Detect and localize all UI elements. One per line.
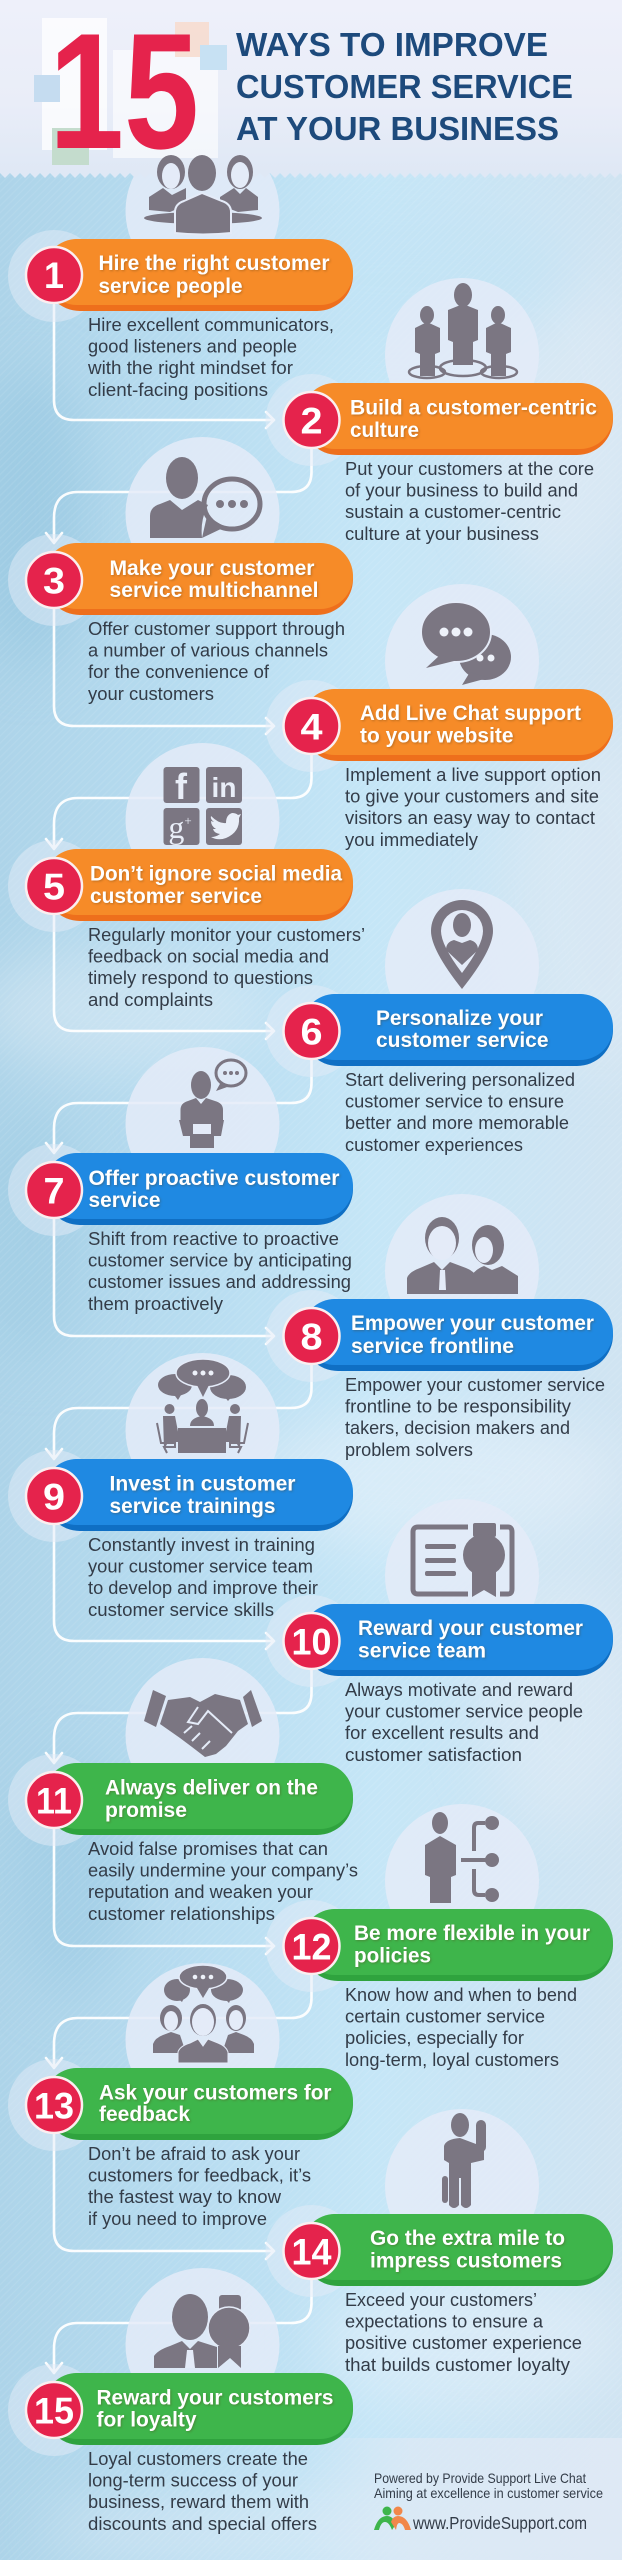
step 12 header pill (266, 1900, 613, 2070)
step 1 body text (87, 315, 334, 400)
step 4 header pill: 4 (300, 706, 323, 748)
icon: location pin with person (431, 900, 493, 989)
icon: speaker at podium (179, 1060, 246, 1148)
step 7 header pill: service (88, 1188, 161, 1212)
step 13 header pill: 13 (34, 2086, 74, 2126)
icon: customer group with bubbles (153, 1965, 254, 2063)
step 13 header pill: feedback (99, 2102, 190, 2126)
step 14 header pill: 14 (292, 2232, 332, 2272)
step 9 body text: customer service skills (88, 1600, 274, 1620)
step 4 header pill: to your website (360, 724, 514, 748)
step 14 header pill: Go the extra mile to (370, 2226, 565, 2250)
icon: team at table (144, 155, 262, 234)
step 14 body text: that builds customer loyalty (345, 2355, 570, 2375)
step 1 body text: good listeners and people (88, 336, 297, 356)
step 2 header pill: 2 (300, 400, 322, 442)
step 12 body text: policies, especially for (345, 2028, 524, 2048)
step 10 header pill: Reward your customer (358, 1616, 584, 1640)
step 10 body text: for excellent results and (345, 1723, 539, 1743)
step 11 (8, 1658, 358, 1924)
step 15 body text (88, 2449, 317, 2534)
step 6 body text (345, 1070, 575, 1155)
step 6 header pill: 6 (300, 1012, 322, 1052)
step 3 body text (88, 619, 345, 704)
step 4 body text (345, 765, 601, 850)
step 2 (266, 278, 613, 544)
step 10 (266, 1499, 613, 1765)
step 11 header pill: promise (105, 1798, 187, 1822)
step 12 header pill: 12 (292, 1926, 332, 1968)
step 8 body text: Empower your customer service (345, 1375, 605, 1395)
step 2 body text: sustain a customer-centric (345, 502, 561, 522)
icon: man with three options (425, 1812, 499, 1903)
step 9 header pill: 9 (43, 1476, 65, 1518)
step 13 header pill: Ask your customers for (99, 2080, 332, 2104)
icon: man raising hand (442, 2113, 486, 2208)
step 8 header pill (266, 1290, 613, 1460)
step 9 (8, 1353, 353, 1620)
step 10 body text: your customer service people (345, 1702, 583, 1722)
title: WAYS TO IMPROVE (236, 26, 548, 63)
title: AT YOUR BUSINESS (236, 110, 559, 147)
icon: social media tiles: f (175, 766, 188, 807)
step 5 body text: feedback on social media and (88, 946, 329, 966)
step 15 header pill (8, 2364, 353, 2534)
step 15 header pill: 15 (34, 2390, 74, 2432)
step 4 body text: to give your customers and site (345, 786, 599, 806)
step 12 body text: certain customer service (345, 2006, 545, 2026)
step 7 header pill: 7 (44, 1170, 64, 1212)
step 2 header pill: culture (350, 418, 419, 442)
icon: certificate with seal (413, 1523, 512, 1597)
step 11 body text: Avoid false promises that can (88, 1839, 328, 1859)
step 8 body text (345, 1375, 605, 1460)
step 3 header pill (8, 534, 353, 704)
decorative title squares (34, 18, 227, 165)
step 6 body text: Start delivering personalized (345, 1070, 575, 1090)
footer credit: Powered by Provide Support Live Chat (374, 2470, 586, 2486)
step 11 body text: easily undermine your company’s (88, 1860, 358, 1880)
step 6 header pill: Personalize your (376, 1006, 544, 1030)
step 9 body text: your customer service team (88, 1556, 313, 1576)
step 11 body text: reputation and weaken your (88, 1882, 313, 1902)
step 5 header pill: 5 (43, 866, 65, 908)
step 10 header pill: 10 (292, 1622, 332, 1662)
step 3 body text: a number of various channels (88, 640, 328, 660)
step 14 (266, 2109, 613, 2375)
step 1 header pill: service people (98, 274, 243, 298)
step 5 header pill: customer service (90, 884, 262, 908)
step 11 header pill: Always deliver on the (105, 1776, 318, 1800)
step 1 header pill: 1 (44, 255, 64, 296)
step 14 body text: Exceed your customers’ (345, 2290, 537, 2310)
step 7 header pill: Offer proactive customer (88, 1166, 340, 1190)
step 8 header pill: Empower your customer (351, 1311, 595, 1335)
step 11 body text: customer relationships (88, 1904, 275, 1924)
step 2 body text: culture at your business (345, 524, 539, 544)
step 5 body text: and complaints (88, 990, 213, 1010)
icon: meeting with speech bubbles (157, 1359, 248, 1453)
step 3 header pill: Make your customer (110, 556, 315, 580)
step 1 header pill: Hire the right customer (98, 251, 330, 275)
step 8 body text: problem solvers (345, 1440, 473, 1460)
step 1 body text: with the right mindset for (87, 358, 293, 378)
step 2 header pill: Build a customer-centric (350, 396, 597, 420)
icon: man with speech bubble (150, 457, 260, 538)
step 6 (266, 889, 613, 1155)
icon: three standing people (409, 283, 517, 378)
step 10 header pill (266, 1595, 613, 1765)
icon: social media tiles: + (184, 813, 192, 828)
step 1 (8, 155, 353, 400)
step 8 body text: takers, decision makers and (345, 1418, 570, 1438)
step 7 body text (88, 1229, 352, 1314)
step 12 body text (345, 1985, 577, 2070)
step 13 body text: Don’t be afraid to ask your (88, 2144, 300, 2164)
step 6 body text: customer service to ensure (345, 1092, 564, 1112)
step 13 body text (88, 2144, 311, 2229)
step 4 (266, 584, 613, 850)
step 9 body text: Constantly invest in training (88, 1535, 315, 1555)
step 12 body text: long-term, loyal customers (345, 2050, 559, 2070)
icon: social media tiles: g (168, 809, 184, 845)
step 5 body text (88, 925, 365, 1010)
step 4 header pill (266, 680, 613, 850)
step 10 body text: customer satisfaction (345, 1745, 522, 1765)
step 5 body text: timely respond to questions (88, 968, 313, 988)
icon: handshake (144, 1690, 262, 1757)
step 3 header pill: service multichannel (110, 578, 318, 602)
step 15 body text: business, reward them with (88, 2492, 309, 2512)
footer credit (374, 2470, 603, 2533)
step 9 header pill (8, 1450, 353, 1620)
step 8 body text: frontline to be responsibility (345, 1396, 571, 1416)
icon: man with medal (154, 2294, 250, 2368)
step 5 header pill (8, 840, 365, 1010)
step 5 (8, 743, 365, 1010)
step 10 body text: Always motivate and reward (345, 1680, 573, 1700)
step 3 body text: for the convenience of (88, 662, 270, 682)
connector arrows between steps (46, 305, 312, 2373)
step 5 header pill: Don’t ignore social media (90, 862, 343, 886)
step 6 body text: customer experiences (345, 1135, 523, 1155)
icon: two support agents (407, 1217, 518, 1294)
footer credit: Aiming at excellence in customer service (374, 2485, 603, 2501)
step 4 header pill: Add Live Chat support (360, 701, 581, 725)
step 6 header pill (266, 985, 613, 1155)
step 12 header pill: Be more flexible in your (354, 1921, 591, 1945)
step 6 header pill: customer service (376, 1028, 549, 1052)
step 7 body text: customer service by anticipating (88, 1250, 352, 1270)
step 12 body text: Know how and when to bend (345, 1985, 577, 2005)
step 5 body text: Regularly monitor your customers’ (88, 925, 365, 945)
step 9 header pill: Invest in customer (110, 1472, 296, 1496)
step 14 header pill (266, 2205, 613, 2375)
step 15 body text: discounts and special offers (88, 2514, 317, 2534)
step 9 body text (88, 1535, 318, 1620)
step 4 body text: visitors an easy way to contact (345, 808, 595, 828)
step 9 header pill: service trainings (110, 1494, 276, 1518)
step 1 header pill (8, 230, 353, 400)
icon: social media tiles (164, 766, 242, 845)
step 13 (8, 1963, 353, 2229)
step 13 body text: the fastest way to know (88, 2187, 282, 2207)
step 8 (266, 1194, 613, 1460)
logo: Provide Support people (374, 2506, 411, 2530)
step 14 body text: positive customer experience (345, 2333, 582, 2353)
step 8 header pill: 8 (300, 1316, 322, 1358)
step 1 body text: client-facing positions (88, 380, 268, 400)
step 15 body text: long-term success of your (88, 2470, 298, 2490)
step 15 header pill: for loyalty (96, 2408, 197, 2432)
step 7 body text: customer issues and addressing (88, 1272, 351, 1292)
step 2 body text (345, 459, 594, 544)
step 13 body text: customers for feedback, it’s (88, 2166, 311, 2186)
step 6 body text: better and more memorable (345, 1113, 569, 1133)
step 2 body text: Put your customers at the core (345, 459, 594, 479)
step 7 body text: them proactively (88, 1294, 223, 1314)
icon backdrop: step 1 circle (126, 134, 280, 288)
header panel (0, 0, 622, 183)
icon: social media tiles: in (212, 772, 236, 803)
step 2 body text: of your business to build and (345, 480, 578, 500)
step 13 body text: if you need to improve (88, 2209, 267, 2229)
footer panel background (300, 2438, 622, 2560)
step 2 header pill (266, 374, 613, 544)
step 14 header pill: impress customers (370, 2248, 562, 2272)
step 15 body text: Loyal customers create the (88, 2449, 308, 2469)
step 7 (8, 1047, 353, 1314)
step 12 header pill: policies (354, 1944, 431, 1968)
footer credit: www.ProvideSupport.com (412, 2513, 587, 2533)
step 9 body text: to develop and improve their (88, 1578, 318, 1598)
big number 15: 15 (49, 0, 199, 183)
title (236, 26, 573, 147)
step 14 body text: expectations to ensure a (345, 2312, 544, 2332)
step 1 body text: Hire excellent communicators, (88, 315, 334, 335)
step 15 header pill: Reward your customers (96, 2386, 334, 2410)
step 3 body text: your customers (88, 684, 214, 704)
step 4 body text: you immediately (345, 830, 478, 850)
step 14 body text (345, 2290, 582, 2375)
step 4 body text: Implement a live support option (345, 765, 601, 785)
step 3 (8, 437, 353, 704)
step 3 header pill: 3 (43, 560, 65, 602)
step 10 body text (345, 1680, 583, 1765)
icon: two chat bubbles (421, 602, 511, 685)
step 8 header pill: service frontline (351, 1334, 514, 1358)
title: CUSTOMER SERVICE (236, 68, 573, 105)
step 10 header pill: service team (358, 1638, 486, 1662)
step 11 header pill (8, 1754, 358, 1924)
step 3 body text: Offer customer support through (88, 619, 345, 639)
step 7 header pill (8, 1144, 353, 1314)
step 13 header pill (8, 2059, 353, 2229)
step 7 body text: Shift from reactive to proactive (88, 1229, 339, 1249)
step 15 (8, 2268, 353, 2534)
step 11 body text (88, 1839, 358, 1924)
step 11 header pill: 11 (36, 1780, 72, 1822)
step 12 (266, 1804, 613, 2070)
